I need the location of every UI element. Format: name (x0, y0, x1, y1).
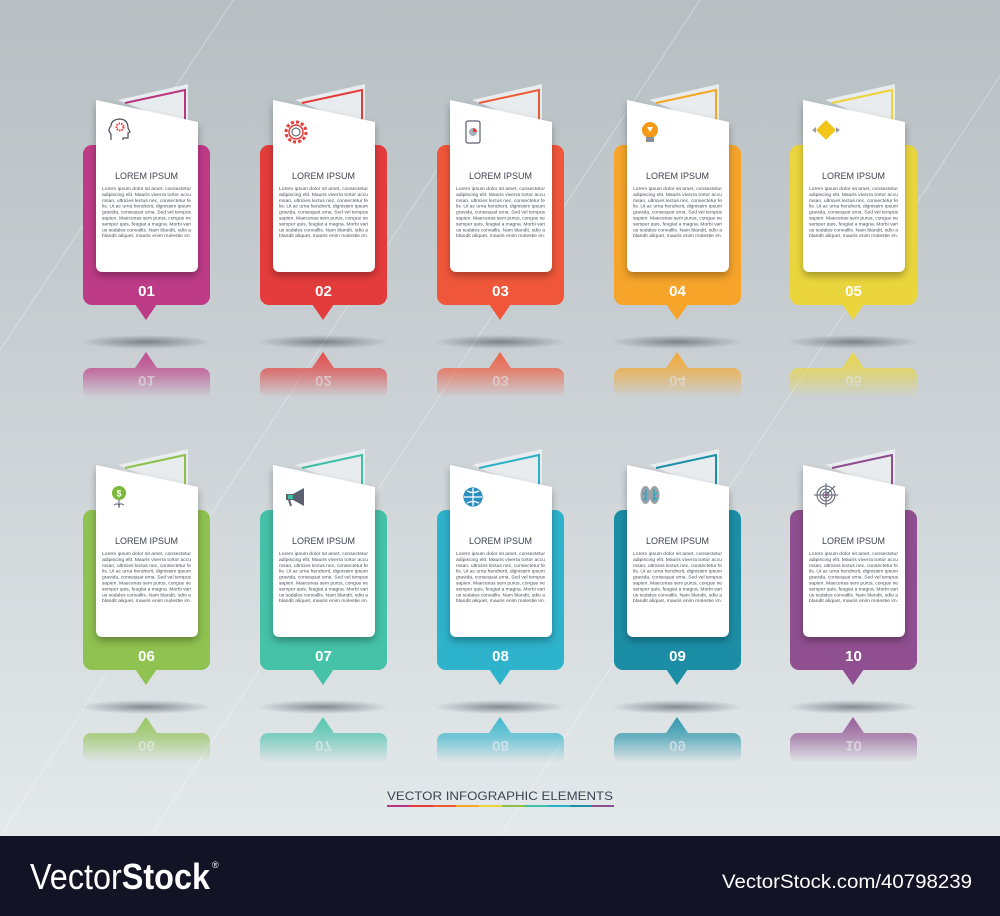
card 07: LOREM IPSUM (292, 536, 355, 546)
card 03 (434, 84, 566, 398)
card 01 (80, 84, 212, 398)
card 02 (257, 84, 389, 398)
card 01: LOREM IPSUM (115, 171, 178, 181)
card 07: 07 (315, 648, 332, 665)
card 03: 03 (492, 283, 509, 300)
card 08: 08 (492, 648, 509, 665)
card 02: 02 (315, 372, 332, 389)
card 06: 06 (138, 737, 155, 754)
footer bar: VectorStock (30, 856, 211, 897)
icon: megaphone (286, 488, 304, 506)
footer bar: VectorStock.com/40798239 (722, 872, 972, 893)
card 04 (611, 84, 743, 398)
card 02: LOREM IPSUM (292, 171, 355, 181)
icon: globe (464, 488, 482, 506)
card 06: LOREM IPSUM (115, 536, 178, 546)
card 01: 01 (138, 283, 155, 300)
footer bar (0, 836, 1000, 916)
card 03: LOREM IPSUM (469, 171, 532, 181)
card 05: LOREM IPSUM (822, 171, 885, 181)
card 08: LOREM IPSUM (469, 536, 532, 546)
icon: brain (640, 486, 660, 504)
card 05 (787, 84, 919, 398)
icon: money plant (112, 486, 126, 508)
card 09: 09 (669, 737, 686, 754)
card 07: 07 (315, 737, 332, 754)
card 04: 04 (669, 372, 686, 389)
card 10: 10 (845, 648, 862, 665)
card 09 (611, 449, 743, 763)
card 08 (434, 449, 566, 763)
card 09: LOREM IPSUM (646, 536, 709, 546)
card 10 (787, 449, 919, 763)
card 06: 06 (138, 648, 155, 665)
card 06 (80, 449, 212, 763)
card 04: 04 (669, 283, 686, 300)
card 10: LOREM IPSUM (822, 536, 885, 546)
icon: bulb (642, 122, 658, 142)
icon: tablet chart (466, 121, 480, 143)
icon: money plant: $ (116, 488, 122, 498)
card 05: 05 (845, 372, 862, 389)
icon: puzzle arrows (812, 120, 840, 140)
card 09: 09 (669, 648, 686, 665)
card 08: 08 (492, 737, 509, 754)
bottom caption: VECTOR INFOGRAPHIC ELEMENTS (387, 789, 613, 803)
icon: gear (286, 122, 306, 142)
footer bar: ® (212, 860, 219, 870)
card 03: 03 (492, 372, 509, 389)
card 10: 10 (845, 737, 862, 754)
card 07 (257, 449, 389, 763)
card 05: 05 (845, 283, 862, 300)
icon: head gear (109, 119, 130, 140)
card 01: 01 (138, 372, 155, 389)
icon: target (814, 483, 838, 507)
card 04: LOREM IPSUM (646, 171, 709, 181)
card 02: 02 (315, 283, 332, 300)
